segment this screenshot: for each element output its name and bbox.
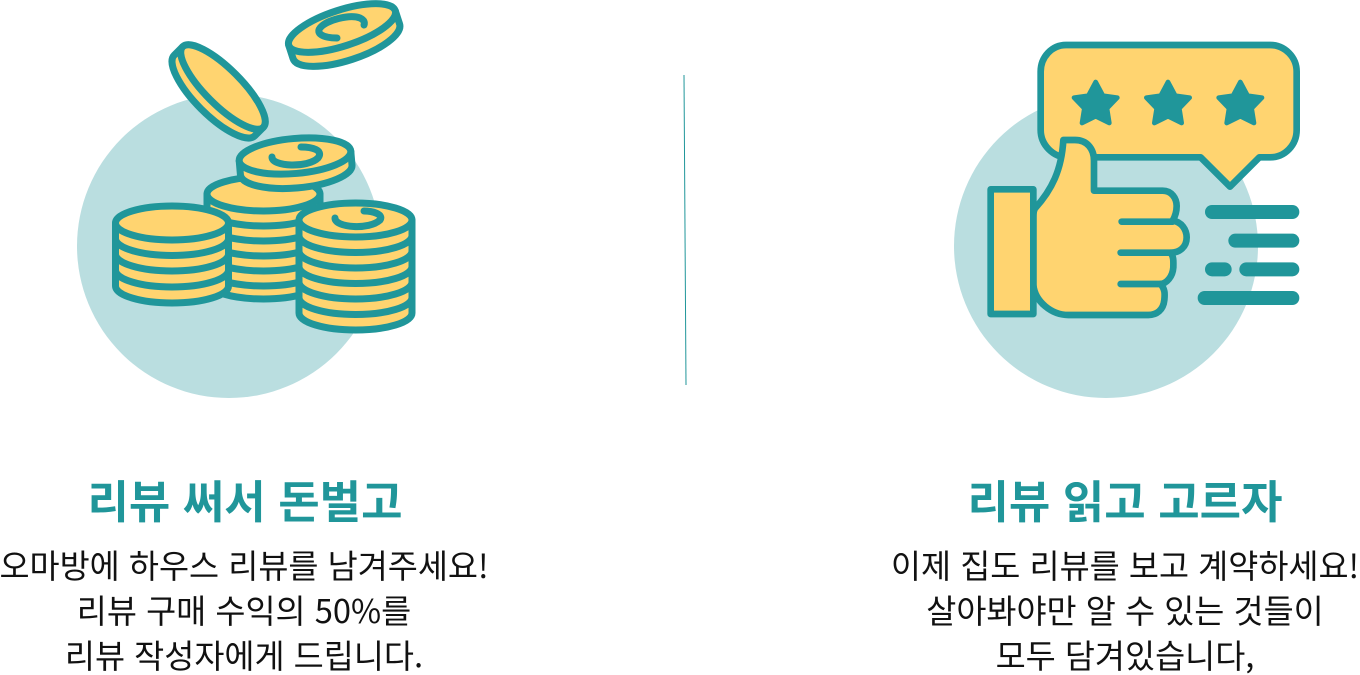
icon: thumbs up review [954, 45, 1299, 398]
left stack [116, 206, 228, 303]
speech bubble [1041, 45, 1297, 187]
text: left: 오마방에 하우스 리뷰를 남겨주세요! [0, 541, 489, 588]
icon: coins [77, 0, 412, 398]
middle stack [207, 177, 320, 299]
heading: right: 리뷰 읽고 고르자 [967, 466, 1282, 531]
divider [684, 75, 686, 385]
right stack [299, 203, 412, 330]
text: right: 이제 집도 리뷰를 보고 계약하세요! [891, 541, 1359, 588]
falling coin left [161, 34, 276, 149]
text: right: 살아봐야만 알 수 있는 것들이 [926, 586, 1324, 633]
stars [1074, 82, 1262, 123]
tilted coin on stack [238, 134, 354, 193]
text: left: 리뷰 구매 수익의 50%를 [77, 586, 411, 633]
text lines [1198, 205, 1299, 305]
text: left [0, 541, 489, 675]
hand [1033, 140, 1187, 315]
falling coin top right [283, 0, 405, 77]
heading: left: 리뷰 써서 돈벌고 [87, 466, 402, 531]
text: right [891, 541, 1359, 675]
cuff [991, 189, 1033, 314]
